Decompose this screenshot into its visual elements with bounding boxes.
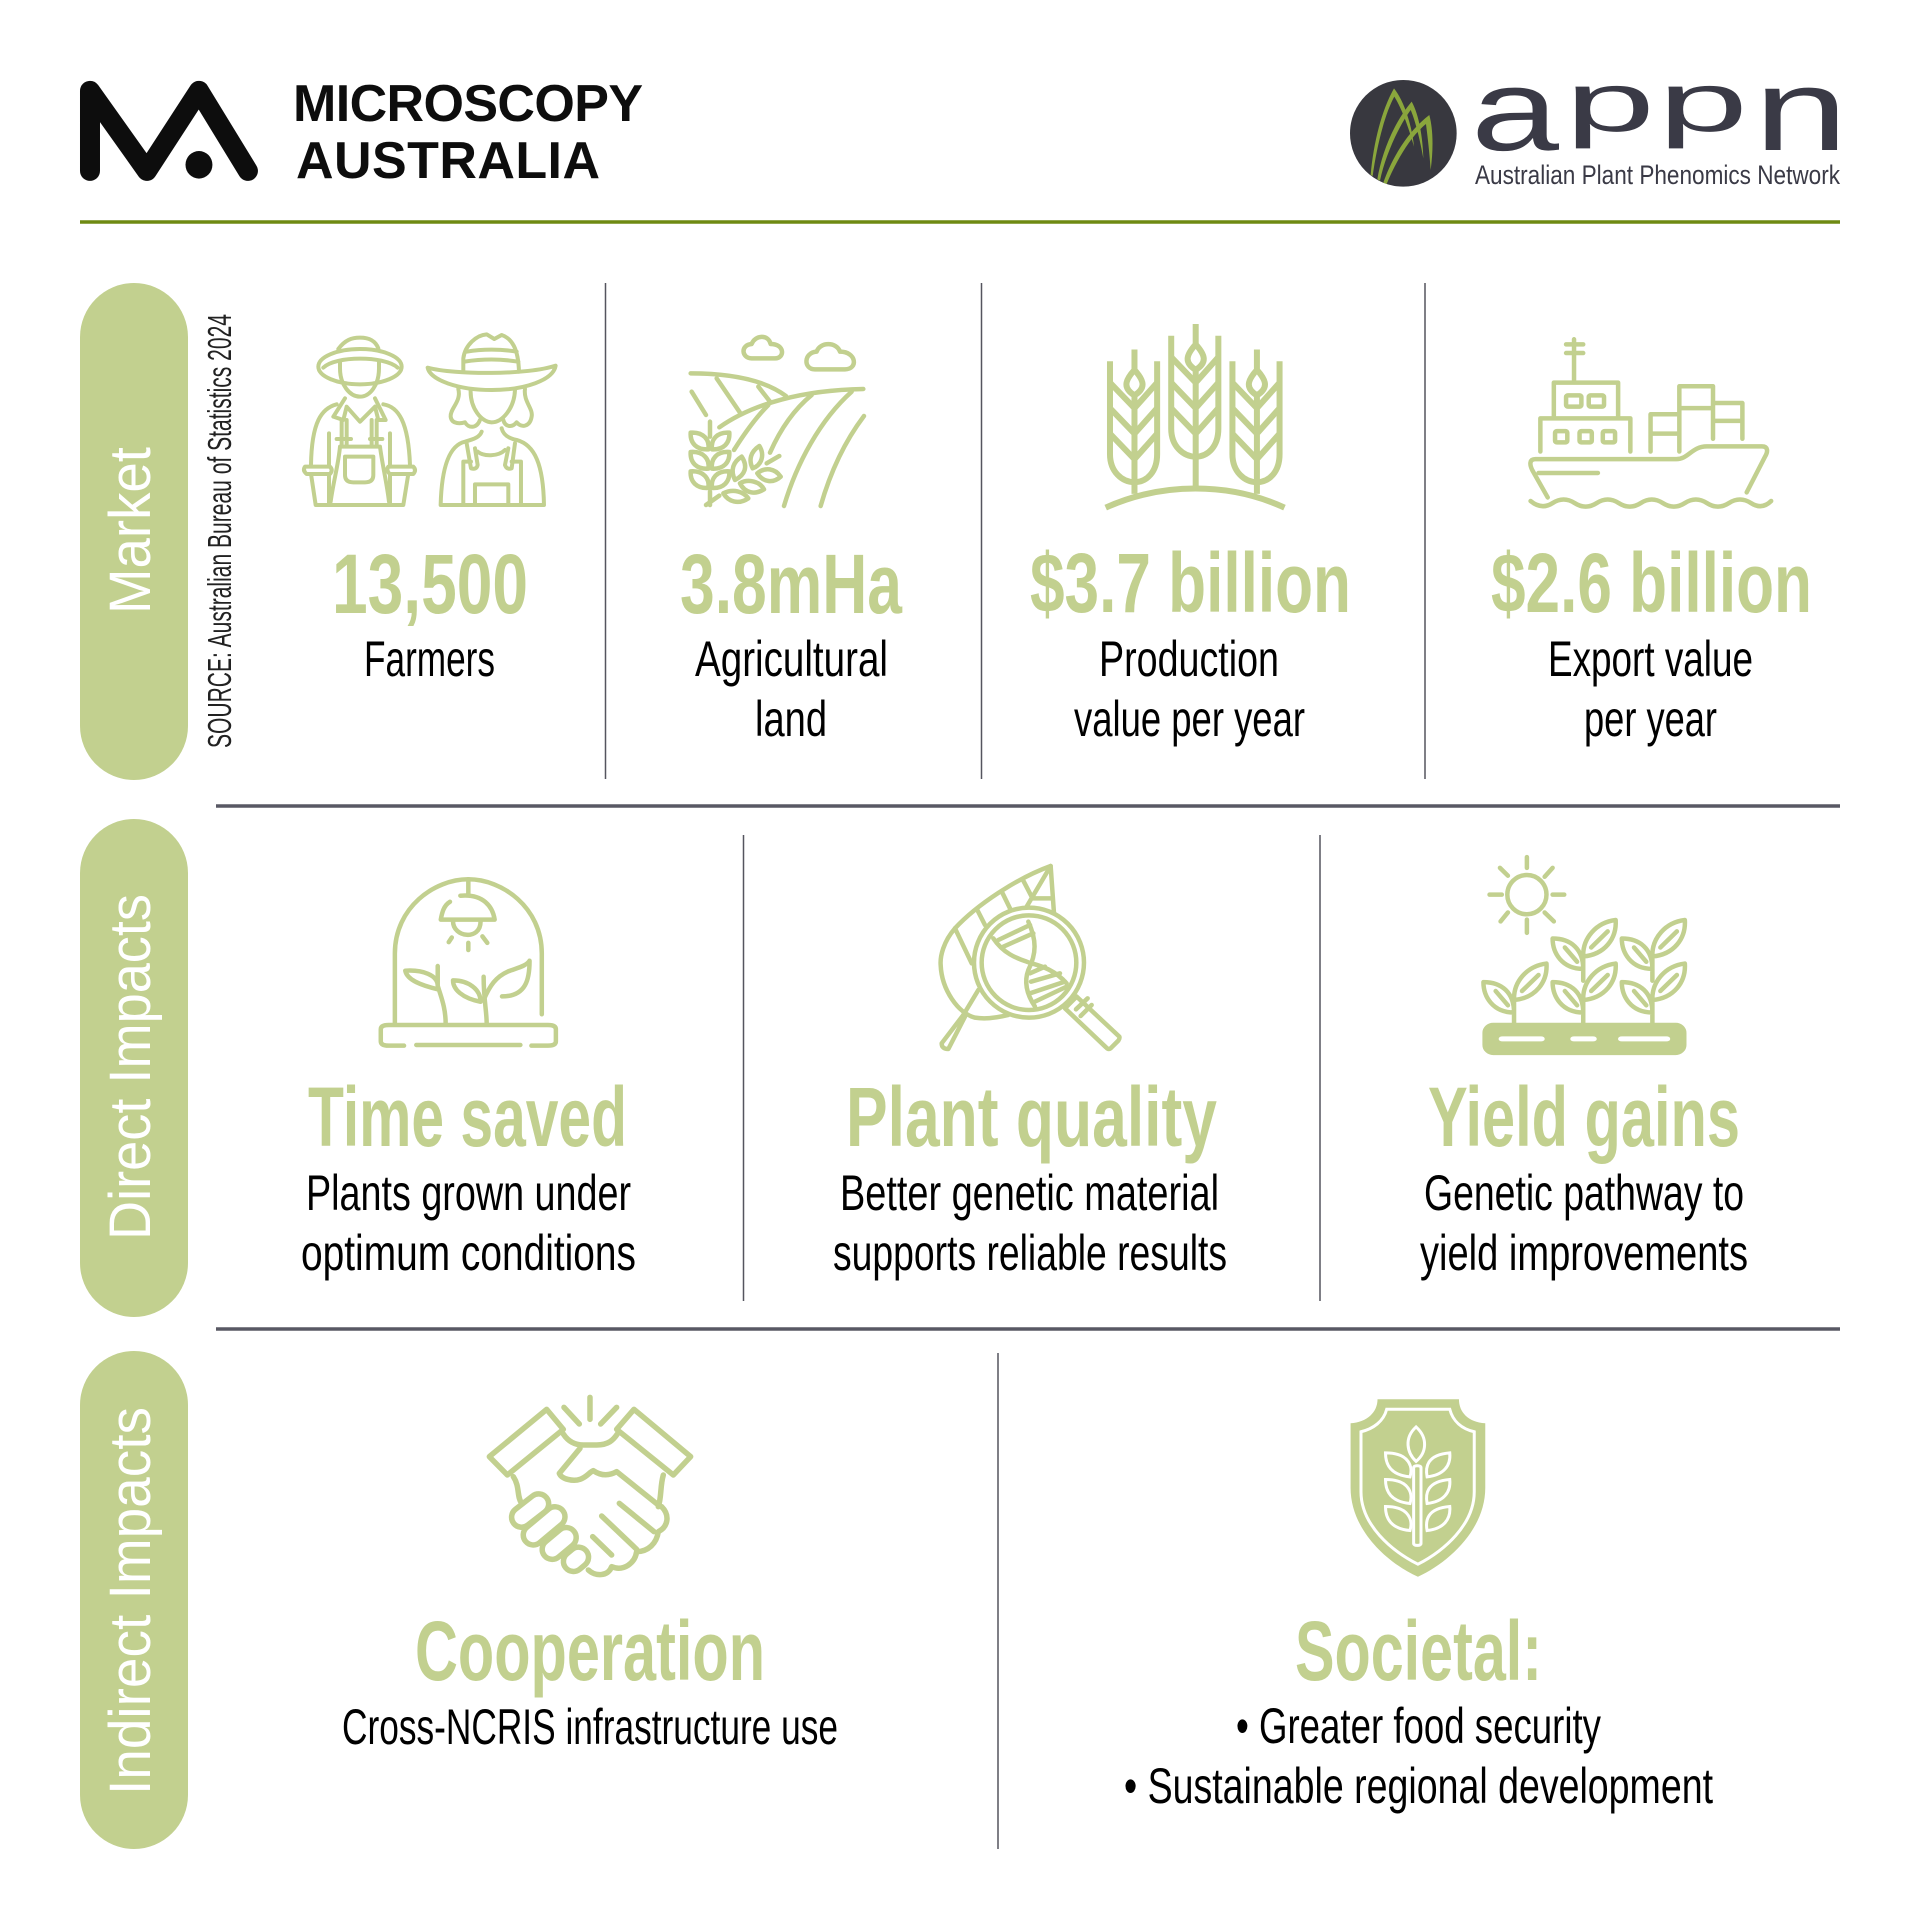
pill: Indirect Impacts <box>80 1351 188 1849</box>
label line 1: Export value <box>1548 631 1753 687</box>
icon: fields with wheat <box>691 337 864 506</box>
label line 1: Production <box>1099 631 1279 687</box>
heading: Plant quality <box>846 1070 1217 1164</box>
icon: three wheat ears <box>1106 324 1284 508</box>
label line 1: Agricultural <box>695 631 888 687</box>
impact: plant quality <box>833 866 1227 1281</box>
heading: Yield gains <box>1428 1070 1740 1164</box>
bullet 1: • Greater food security <box>1236 1698 1601 1754</box>
label line 2: per year <box>1584 691 1717 747</box>
header: Microscopy Australia logo <box>90 75 643 190</box>
source note: SOURCE: Australian Bureau of Statistics 2024 <box>201 314 238 748</box>
stat: farmers <box>304 334 556 687</box>
wordmark: appn: p <box>1565 55 1655 149</box>
stat: agricultural land <box>680 337 903 747</box>
label: Farmers <box>364 631 495 687</box>
panel: indirect impacts <box>80 1351 1713 1849</box>
wordmark: appn: a <box>1471 45 1560 175</box>
pill: Direct Impacts <box>80 819 188 1317</box>
wordmark: Microscopy: MICROSCOPY <box>293 75 643 133</box>
value: 3.8mHa <box>680 537 903 631</box>
description line 1: Plants grown under <box>306 1165 631 1221</box>
panel: direct impacts <box>80 819 1748 1317</box>
wordmark subtitle: Australian Plant Phenomics Network <box>1475 160 1840 190</box>
wordmark: appn: n <box>1754 45 1848 175</box>
icon: two farmers <box>304 334 556 505</box>
description line 2: yield improvements <box>1420 1225 1748 1281</box>
description line 1: Genetic pathway to <box>1424 1165 1744 1221</box>
impact: cooperation <box>342 1397 838 1755</box>
value: $2.6 billion <box>1491 536 1812 630</box>
panel: market <box>80 283 1812 780</box>
icon: shield with wheat <box>1351 1399 1485 1577</box>
wordmark: Australia: AUSTRALIA <box>296 132 600 190</box>
label line 2: land <box>755 691 827 747</box>
heading: Cooperation <box>415 1604 765 1698</box>
description: Cross-NCRIS infrastructure use <box>342 1699 838 1755</box>
impact: societal <box>1124 1399 1713 1814</box>
heading: Societal: <box>1295 1604 1542 1698</box>
icon: plants under a lit dome <box>381 879 556 1046</box>
value: 13,500 <box>332 537 528 631</box>
description line 1: Better genetic material <box>840 1165 1219 1221</box>
bullet 2: • Sustainable regional development <box>1124 1758 1713 1814</box>
impact: yield gains <box>1420 857 1748 1281</box>
description line 2: optimum conditions <box>301 1225 636 1281</box>
pill: Direct Impacts: Direct Impacts <box>98 894 163 1240</box>
description line 2: supports reliable results <box>833 1225 1227 1281</box>
header: APPN logo <box>1350 45 1848 190</box>
icon: leaf under magnifier with DNA <box>941 866 1120 1049</box>
wordmark: appn: p <box>1658 55 1748 149</box>
heading: Time saved <box>308 1070 627 1164</box>
impact: time saved <box>301 879 636 1281</box>
icon: container ship <box>1530 339 1771 507</box>
pill: Indirect Impacts: Indirect Impacts <box>98 1407 163 1795</box>
icon: sun and seedlings <box>1483 857 1685 1053</box>
icon: APPN grass roundel <box>1350 80 1457 187</box>
pill: Market: Market <box>98 447 163 614</box>
wordmark: appn <box>1471 45 1848 175</box>
stat: export value <box>1491 339 1812 747</box>
icon: handshake <box>489 1397 691 1576</box>
stat: production value <box>1030 324 1351 747</box>
icon: MA logo mark <box>90 91 248 179</box>
value: $3.7 billion <box>1030 536 1351 630</box>
label line 2: value per year <box>1074 691 1305 747</box>
pill: Market <box>80 283 188 780</box>
